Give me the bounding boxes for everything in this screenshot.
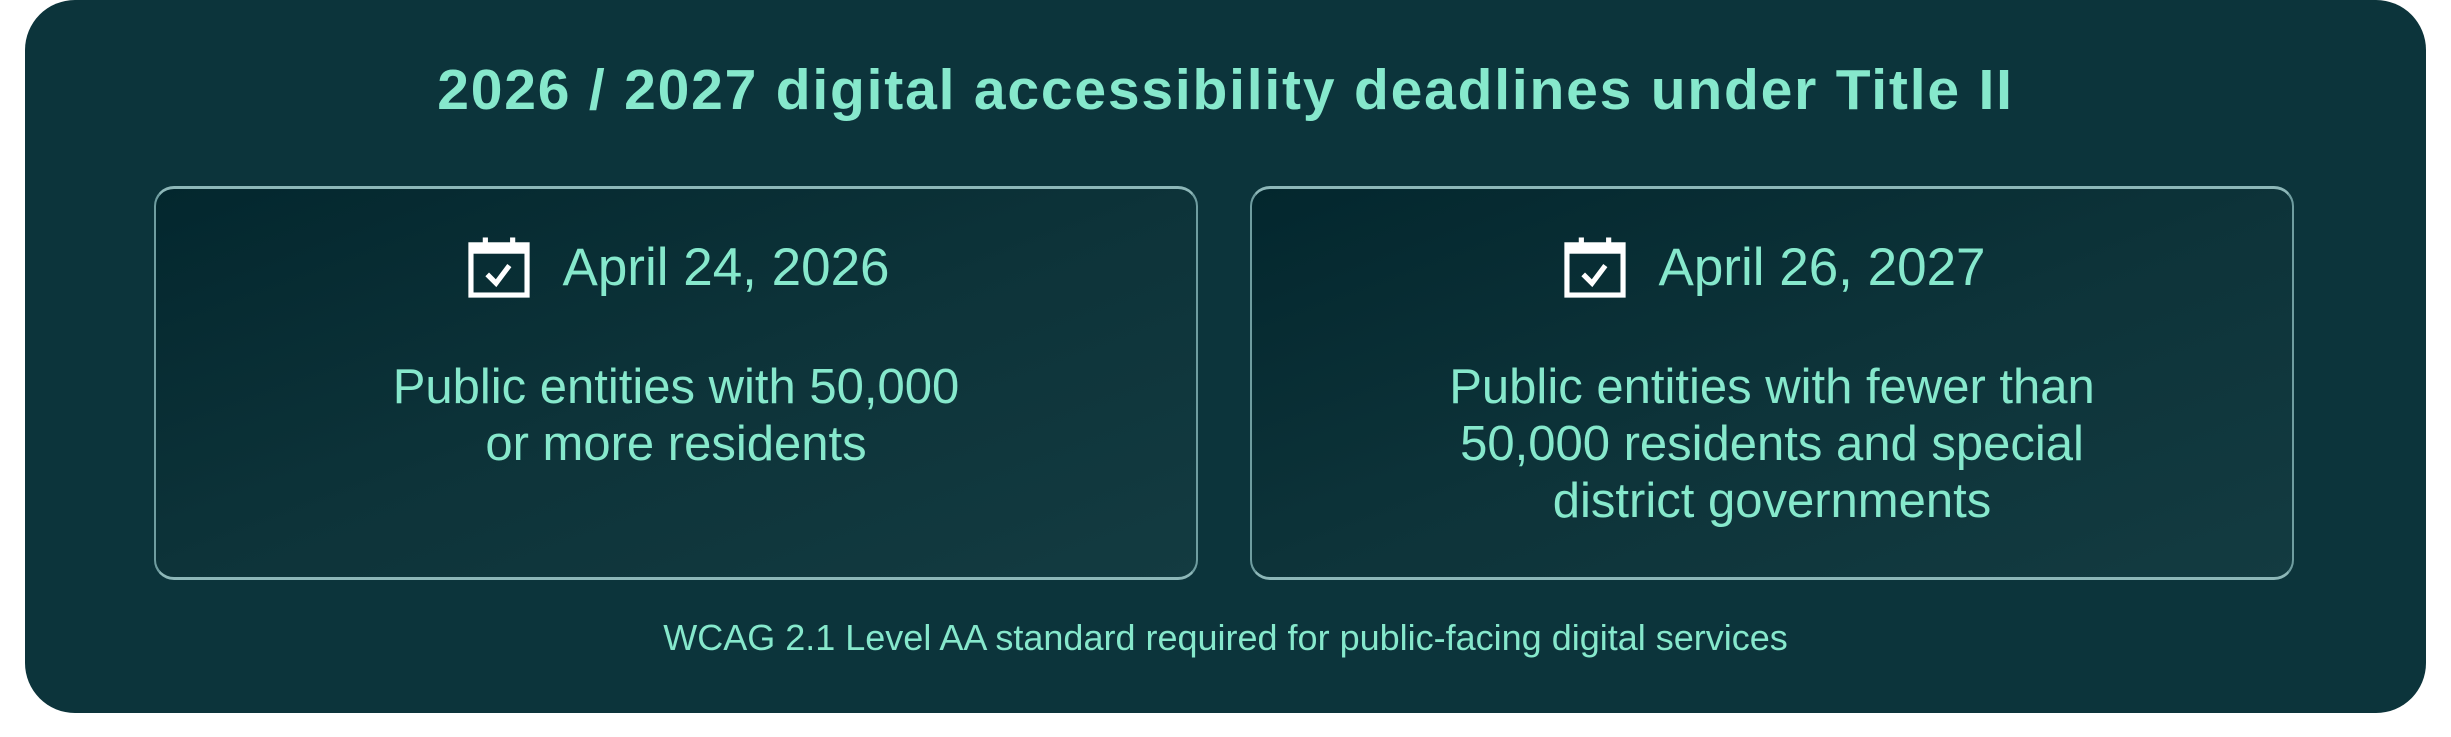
- description 2027: [1449, 360, 2095, 528]
- description 2026: Public entities with 50,000: [393, 360, 959, 414]
- card: 2027 deadline: [1250, 186, 2294, 580]
- description 2027: 50,000 residents and special: [1460, 417, 2084, 471]
- description 2026: or more residents: [485, 417, 867, 471]
- date heading 2027: April 26, 2027: [1658, 238, 1986, 296]
- description 2027: Public entities with fewer than: [1449, 360, 2095, 414]
- date heading 2026: April 24, 2026: [562, 238, 890, 296]
- description 2027: district governments: [1553, 474, 1991, 528]
- card: 2026 deadline: [154, 186, 1198, 580]
- footer note: WCAG 2.1 Level AA standard required for public-facing digital services: [663, 617, 1788, 658]
- title: 2026 / 2027 digital accessibility deadlines under Title II: [437, 58, 2014, 122]
- description 2026: [393, 360, 959, 471]
